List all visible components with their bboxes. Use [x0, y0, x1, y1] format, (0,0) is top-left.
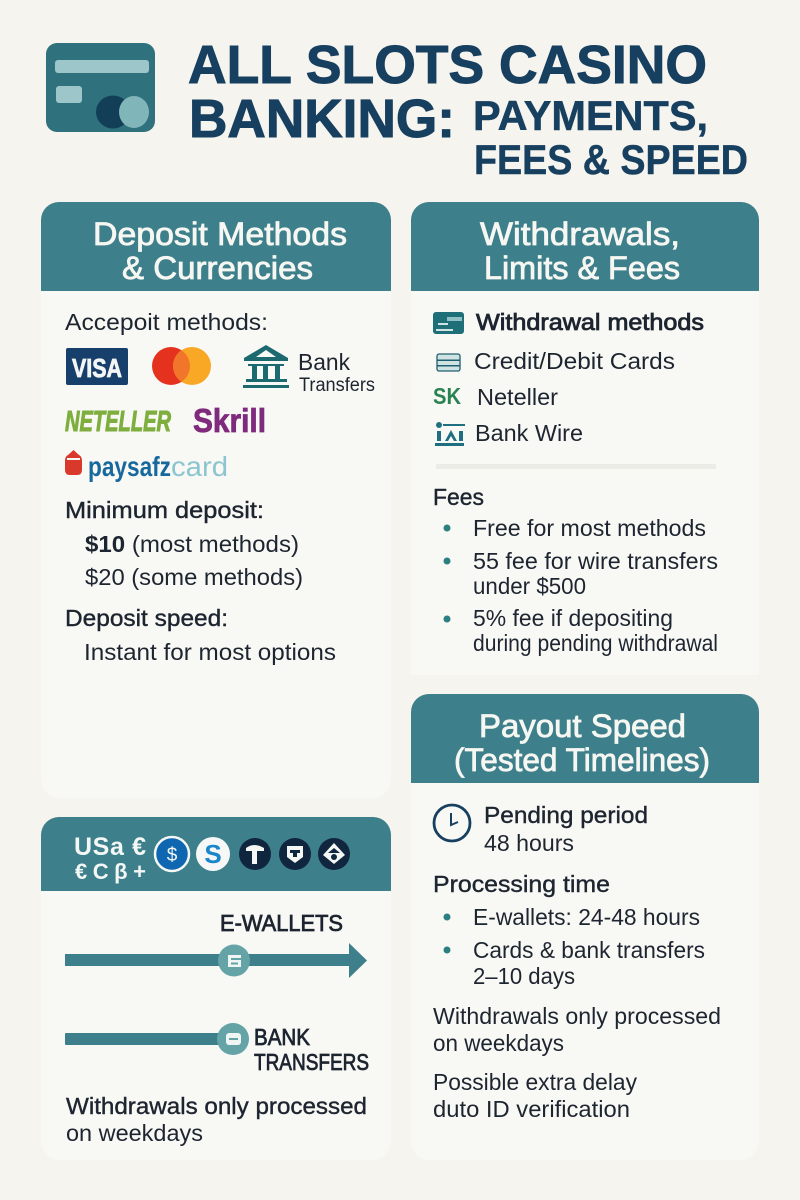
bar: bank transfers speed: [65, 1023, 249, 1055]
panel header: withdrawals: Withdrawals,: [480, 216, 680, 252]
pending period: Pending period: [484, 802, 648, 828]
currency symbols: USa €: [74, 833, 146, 861]
label: e-wallets: E-WALLETS: [220, 910, 343, 936]
icon: withdrawal card: [433, 312, 464, 334]
panel header: withdrawals: [411, 202, 759, 291]
logo: Visa: VISA: [72, 353, 122, 383]
title: ALL SLOTS CASINO: [188, 35, 707, 95]
weekday processing note: on weekdays: [433, 1030, 564, 1056]
verification delay note: Possible extra delay: [433, 1069, 637, 1095]
minimum deposit: [65, 497, 303, 590]
icon: bank: [243, 345, 289, 388]
deposit speed: [65, 605, 336, 665]
title: [188, 35, 748, 183]
weekday note: on weekdays: [66, 1120, 203, 1146]
panel header: deposit methods: [41, 202, 391, 291]
fees list: under $500: [473, 573, 586, 599]
icon: dark coin one: [239, 838, 271, 870]
logo: Visa: [66, 348, 128, 385]
panel: currencies and speed comparison: [41, 817, 391, 1160]
icon: credit card: [46, 43, 155, 132]
pending period: 48 hours: [484, 830, 574, 856]
verification delay note: [433, 1069, 637, 1122]
weekday processing note: Withdrawals only processed: [433, 1003, 721, 1029]
logo: Mastercard: [152, 347, 211, 385]
panel: withdrawals, limits and fees: [411, 202, 759, 675]
panel header: withdrawals: Limits & Fees: [484, 250, 680, 286]
deposit speed: Instant for most options: [84, 639, 336, 665]
panel header: payout speed: [411, 694, 759, 783]
icon: dollar coin: $: [167, 845, 178, 866]
currency symbols: [74, 833, 146, 884]
panel header: currencies: [41, 817, 391, 891]
processing time list: E-wallets: 24-48 hours: [473, 904, 700, 930]
icon: dollar coin: [155, 837, 189, 871]
credit and debit cards: Credit/Debit Cards: [474, 348, 675, 374]
title: PAYMENTS,: [473, 92, 708, 139]
icon: card stripes: [437, 354, 460, 371]
processing time heading: Processing time: [433, 871, 610, 897]
logo: paysafecard: [65, 450, 228, 482]
icon: dark coin two: [279, 838, 311, 870]
label: bank transfers: [254, 1024, 369, 1075]
icon: clock: [434, 805, 470, 841]
icon: S coin: S: [204, 839, 222, 869]
withdrawal methods heading: Withdrawal methods: [476, 309, 704, 335]
accepted methods label: Accepoit methods:: [65, 309, 268, 335]
panel header: deposit methods: & Currencies: [122, 250, 313, 286]
panel: deposit methods and currencies: [41, 202, 391, 798]
fees heading: Fees: [433, 484, 484, 510]
currency symbols: € C β +: [75, 859, 146, 884]
verification delay note: duto ID verification: [433, 1096, 630, 1122]
panel: payout speed: [411, 694, 759, 1160]
title: BANKING:: [189, 89, 455, 149]
icon: dark coin three: [318, 838, 350, 870]
logo: Skrill: Skrill: [193, 402, 266, 439]
weekday processing note: [433, 1003, 721, 1056]
label: bank transfers: BANK: [254, 1024, 311, 1050]
icon: SK mark: SK: [433, 383, 461, 409]
logo: paysafecard: card: [171, 451, 228, 482]
fees list: 55 fee for wire transfers: [473, 548, 718, 574]
bank wire: Bank Wire: [475, 420, 583, 446]
neteller: Neteller: [477, 384, 558, 410]
deposit speed: Deposit speed:: [65, 605, 228, 631]
label: bank transfers: TRANSFERS: [254, 1049, 369, 1075]
fees list: 5% fee if depositing: [473, 605, 673, 631]
panel header: deposit methods: Deposit Methods: [93, 216, 347, 252]
bank transfers label: Transfers: [299, 375, 375, 396]
minimum deposit: $20 (some methods): [85, 564, 303, 590]
arrow: e-wallets speed: [65, 943, 367, 978]
logo: paysafecard: paysafᴢ: [88, 451, 171, 482]
bank transfers label: Bank: [298, 349, 350, 375]
weekday note: Withdrawals only processed: [66, 1093, 367, 1119]
panel header: payout speed: (Tested Timelines): [454, 742, 710, 778]
fees list: during pending withdrawal: [473, 630, 718, 656]
pending period: [484, 802, 648, 856]
fees list: [444, 515, 718, 656]
minimum deposit: $10 (most methods): [85, 531, 299, 557]
minimum deposit: Minimum deposit:: [65, 497, 264, 523]
title: FEES & SPEED: [474, 136, 748, 183]
fees list: Free for most methods: [473, 515, 706, 541]
panel header: payout speed: Payout Speed: [479, 708, 686, 744]
logo: Neteller: NETELLER: [65, 406, 171, 438]
icon: S coin: [196, 837, 230, 871]
processing time list: Cards & bank transfers: [473, 937, 705, 963]
processing time list: 2–10 days: [473, 963, 575, 989]
icon: bank wire: [435, 422, 465, 446]
processing time list: [444, 904, 705, 989]
bank transfers label: [298, 349, 375, 396]
weekday note: [66, 1093, 367, 1146]
